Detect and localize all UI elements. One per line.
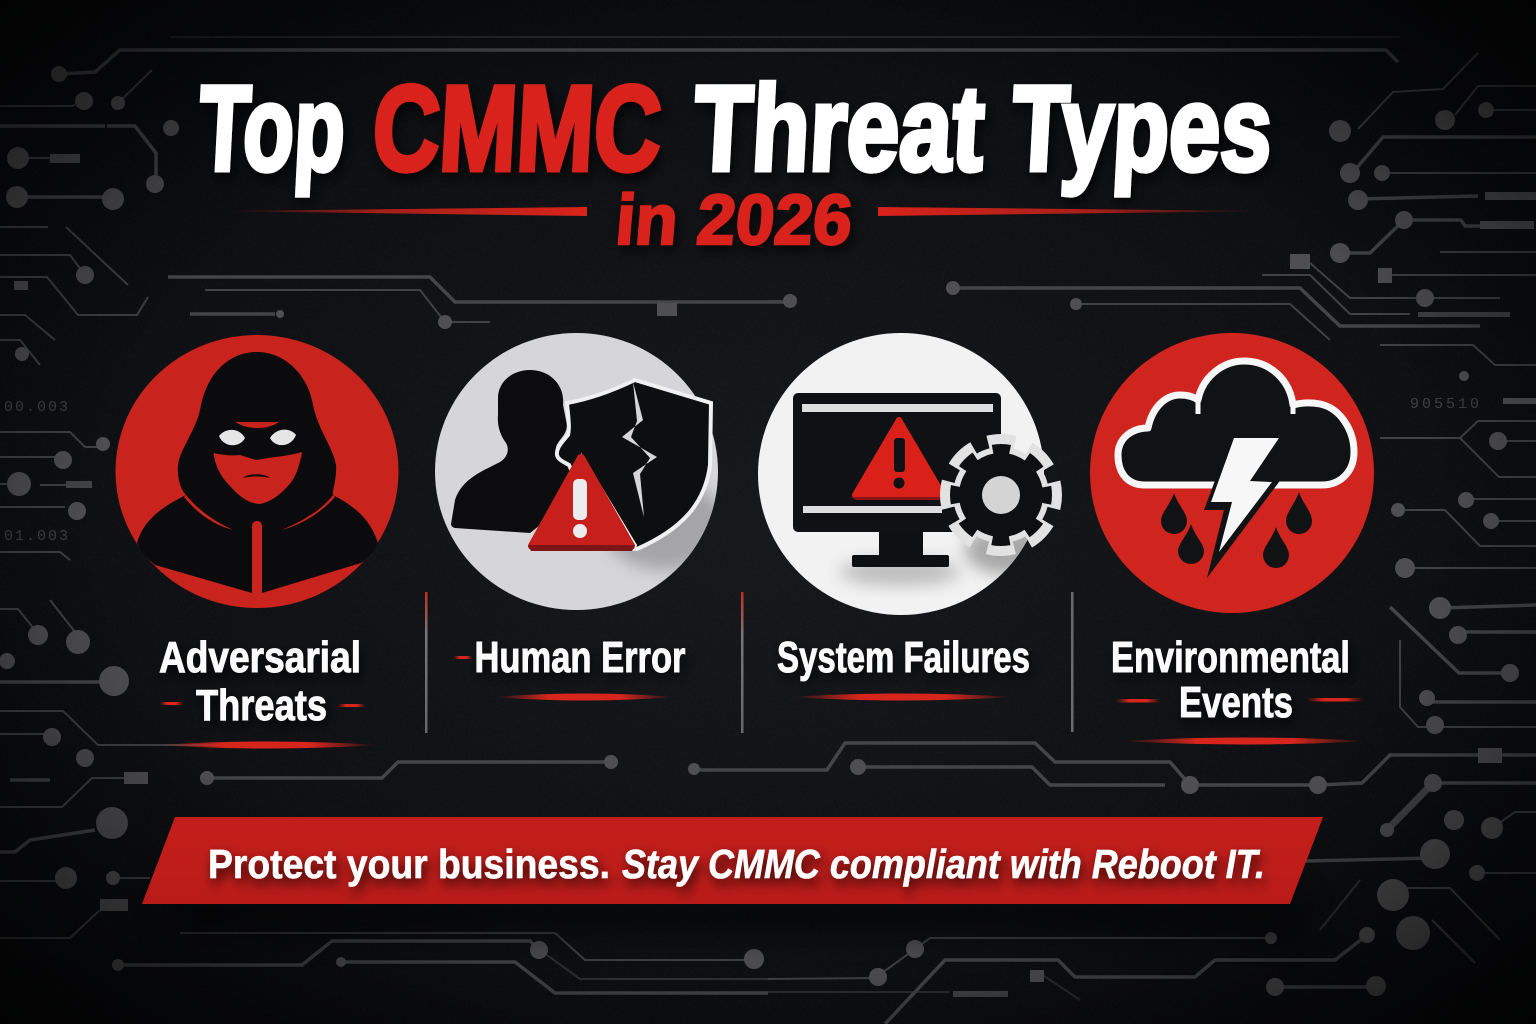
panel: human error: [435, 333, 727, 700]
label: environmental events: [1111, 633, 1350, 727]
label: environmental events: Events: [1179, 678, 1293, 727]
panel: system failures: [758, 333, 1055, 700]
label: human error: Human Error: [474, 633, 686, 682]
banner: [142, 817, 1323, 935]
faint binary digits: [4, 396, 1482, 545]
icon: storm cloud: [1090, 333, 1374, 613]
label: adversarial threats: [159, 633, 361, 730]
title: Threat: [691, 60, 988, 196]
icon: hooded hacker: [116, 335, 398, 608]
label: environmental events: Environmental: [1111, 633, 1350, 682]
divider: [425, 592, 428, 733]
faint binary digits: 905510: [1410, 396, 1482, 413]
subtitle: in 2026: [613, 181, 856, 260]
label accents: [158, 702, 378, 748]
title: [196, 60, 1276, 196]
banner text: [208, 841, 1265, 887]
divider: [1071, 592, 1074, 732]
subtitle rule: right: [878, 207, 1270, 216]
title: Types: [1009, 60, 1276, 196]
subtitle rule: left: [215, 207, 587, 216]
circuit traces: bottom: [0, 600, 1536, 1024]
label accents: [1116, 698, 1366, 744]
faint binary digits: 00.003: [4, 399, 70, 416]
divider: [741, 592, 744, 733]
label accents: [454, 656, 674, 700]
banner text: Stay CMMC compliant with Reboot IT.: [622, 841, 1265, 887]
label: adversarial threats: Threats: [196, 681, 327, 730]
label: adversarial threats: Adversarial: [159, 633, 361, 682]
icon: person with broken shield and warning: [435, 333, 727, 610]
title: Top: [196, 60, 349, 196]
label accent: [792, 694, 1013, 700]
circuit traces: top: [0, 37, 1536, 340]
panel: adversarial threats: [116, 335, 398, 748]
title: CMMC: [370, 60, 665, 196]
faint binary digits: 01.003: [4, 528, 70, 545]
panel: environmental events: [1090, 333, 1374, 744]
icon: monitor with warning and gear: [758, 333, 1055, 615]
label: system failures: System Failures: [777, 633, 1030, 682]
banner text: Protect your business.: [208, 841, 610, 887]
circuit traces: middle sides: [0, 340, 1536, 568]
